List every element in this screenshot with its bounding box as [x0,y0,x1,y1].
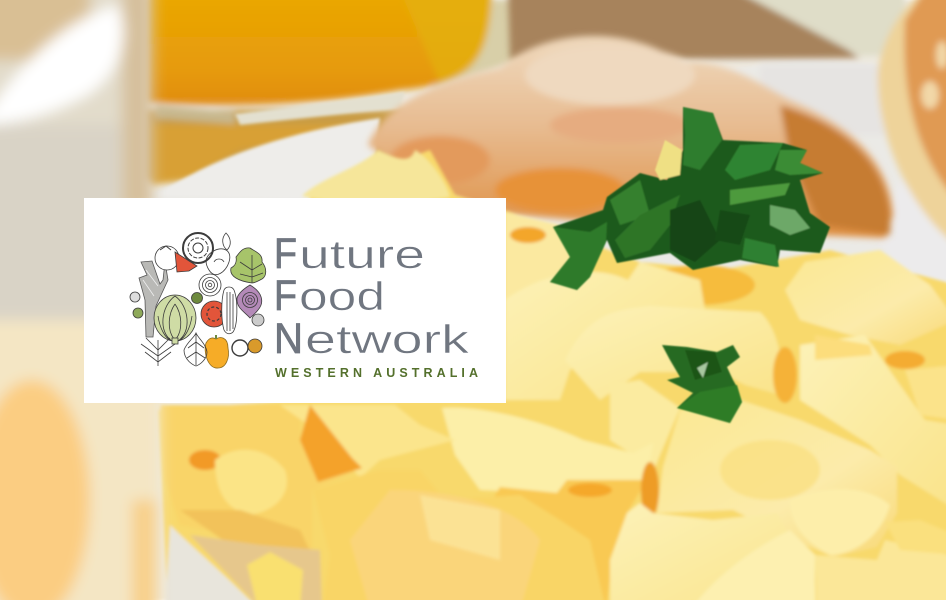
wordmark: Future: uture [299,233,425,277]
icon: discs and ring [130,292,264,356]
wordmark: Future: F [274,230,297,278]
logo card [84,198,506,403]
icon: eggplant [222,287,237,334]
icon: tomato [155,246,197,272]
icon: yellow capsicum [205,335,229,368]
wordmark: Food: ood [299,275,385,319]
egg piece: bottom centre [610,503,817,600]
icon: spiral [199,274,221,296]
juice glass [145,0,520,185]
icon: top leaf and pepper outline [206,233,230,275]
wordmark: Western Australia: WESTERN AUSTRALIA [275,366,478,380]
icon: beetroot [237,285,262,318]
plate rim in front of juice [155,118,380,200]
bread [368,36,893,238]
wordmark: Food: F [274,272,297,320]
wordmark: Future [274,230,425,278]
icon: herb sprigs [141,333,207,366]
icon: vegetable illustration [130,233,266,368]
juice glass rim [235,92,405,125]
egg piece: front left folded [442,408,653,493]
left blurred glass [0,0,160,600]
icon: onion [154,295,196,344]
wordmark [274,230,470,363]
wordmark: Network [274,315,470,363]
icon: citrus slice [183,233,213,263]
egg piece: large front centre [657,400,897,557]
icon: leek [139,261,168,337]
egg piece: lower left cluster [160,405,360,550]
wordmark: Network: N [274,315,303,363]
wordmark: Network: etwork [305,318,470,362]
blurred items at top right [508,0,946,285]
parsley sprig, large [550,107,830,290]
icon: green leaves [231,248,266,283]
parsley sprig, small [662,345,742,423]
wordmark: Food [274,272,385,320]
scrambled eggs [158,150,946,600]
egg piece: foreground mound [313,470,606,600]
icon: tomato slice [201,301,227,327]
